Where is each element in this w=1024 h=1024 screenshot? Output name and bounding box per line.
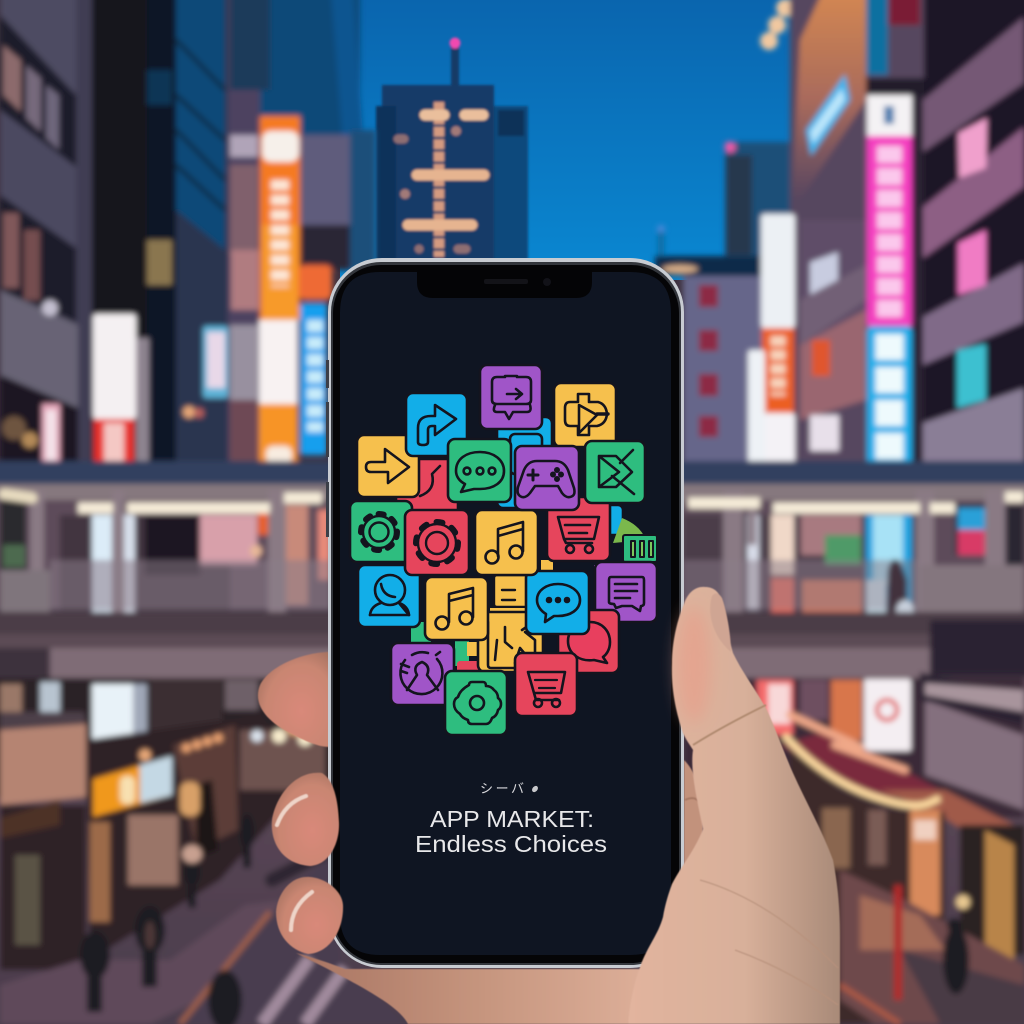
right buildings: [748, 0, 1024, 470]
left shop structures: [0, 684, 22, 720]
left buildings: [0, 0, 376, 470]
icon: yellow right arrow: [357, 435, 419, 497]
app icon cluster: [350, 365, 657, 735]
right distant building: [655, 0, 794, 466]
person on walkway: [886, 559, 907, 626]
icon: red speech bubble: [558, 610, 619, 673]
index finger: [258, 652, 330, 747]
railing: [50, 560, 330, 610]
title: Endless Choices: [415, 831, 607, 857]
side buttons: [326, 360, 329, 537]
japanese caption: シーバ: [480, 781, 524, 796]
title: [415, 806, 607, 857]
icon: chart tile: [623, 535, 657, 562]
hand: front fingers and palm: [272, 587, 840, 1024]
icon: yellow clock tile: [478, 612, 543, 672]
palm and thumb: [628, 587, 840, 1024]
icon: purple game controller: [515, 446, 579, 510]
icon: red gear: [405, 510, 469, 575]
ceiling lights: [4, 494, 32, 498]
icon: blue chat: [526, 571, 589, 634]
icon: purple tray top: [480, 365, 542, 429]
title: APP MARKET:: [430, 806, 594, 832]
icon: yellow play puzzle: [554, 383, 616, 447]
thumb flush: [677, 607, 711, 723]
icon: green gear bottom: [445, 671, 507, 735]
deck beam: [0, 612, 1024, 634]
ring finger: [276, 877, 343, 954]
icon: yellow music note: [475, 510, 538, 575]
distant tower with lights: [376, 38, 528, 266]
lower street: [0, 672, 1024, 1024]
walkway structure: [0, 461, 1024, 678]
left neon signs: [93, 116, 332, 466]
icon: red shopping cart lower: [515, 653, 577, 716]
hand: fingers behind phone edge: [258, 652, 703, 870]
smartphone: [326, 258, 684, 968]
back layer tiles: [396, 417, 646, 675]
columns: [30, 490, 1005, 655]
icon: green chat: [448, 439, 511, 502]
icon: green gear left: [350, 501, 412, 562]
thumb nail: [710, 593, 731, 652]
pedestrians: [80, 814, 254, 1024]
icon: purple message: [595, 562, 657, 622]
icon: purple profile: [391, 643, 454, 705]
pink and blue neon sign: [867, 95, 912, 469]
icon: small leaf: [531, 785, 539, 793]
icon: yellow music note lower: [425, 577, 488, 640]
icon: red shopping cart: [547, 497, 610, 561]
icon: green no-mail: [585, 441, 645, 503]
icon: doc tile: [490, 575, 528, 618]
left interior panels: [0, 500, 26, 570]
screen: [340, 272, 671, 955]
white and orange sign: [748, 214, 795, 468]
phone frame: [328, 258, 684, 968]
right interior panels: [683, 515, 923, 610]
icon: blue person: [358, 565, 420, 627]
icon: blue turn arrow: [406, 393, 467, 456]
lower palm under phone: [296, 953, 640, 1024]
right lower shops: [683, 678, 1024, 818]
middle finger: [272, 773, 339, 866]
notch: [417, 270, 592, 298]
left orange shop sign: [93, 756, 172, 817]
street road: [170, 850, 405, 1024]
